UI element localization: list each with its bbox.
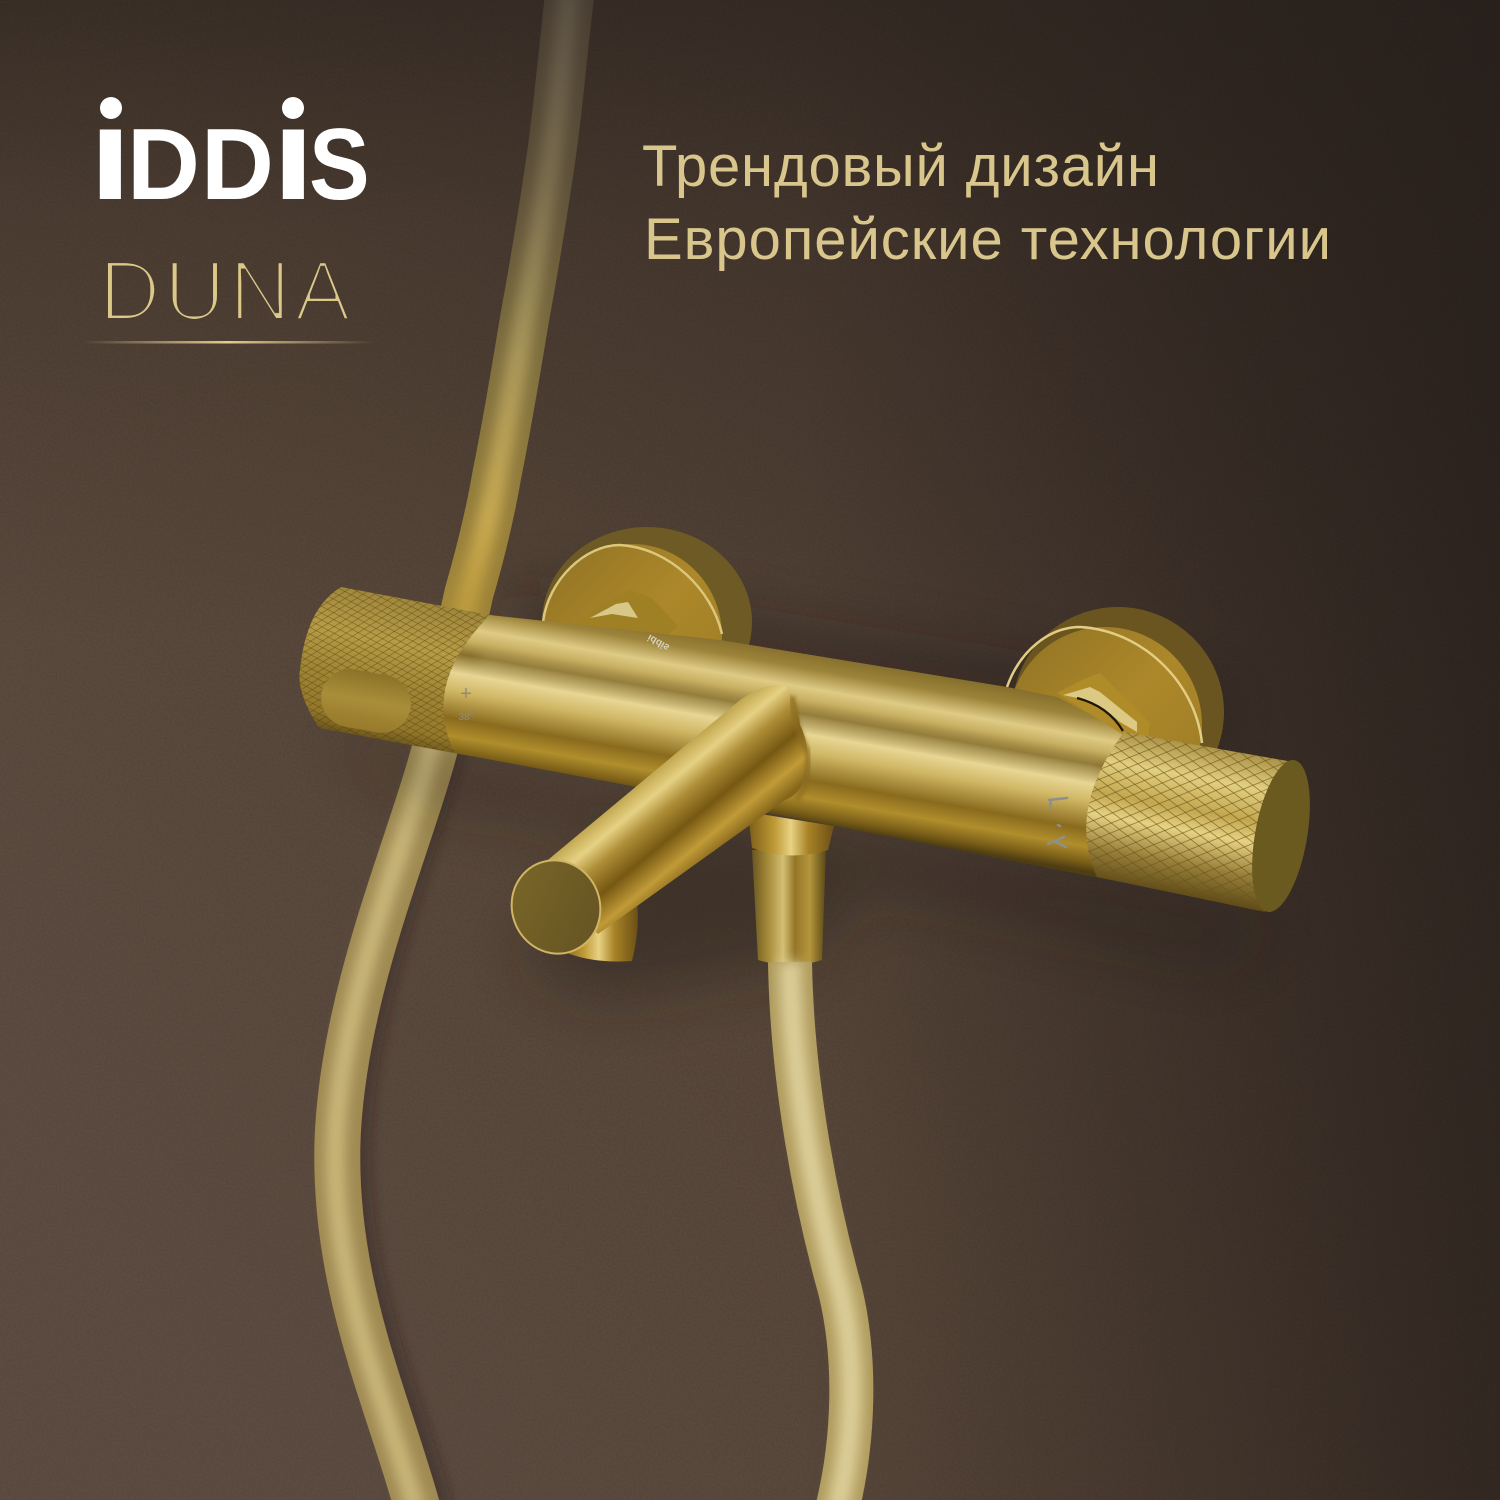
- mode icons: [1048, 798, 1067, 847]
- left plate rim: [543, 545, 722, 634]
- left inner plate: [542, 544, 722, 728]
- upper shower hose: [452, 0, 570, 670]
- logo divider: [82, 341, 374, 344]
- right nut highlight: [1063, 687, 1137, 732]
- logo wordmark: D: [201, 109, 274, 221]
- headline: [642, 134, 1331, 272]
- right outer plate: [1012, 607, 1224, 817]
- right knob end cap: [1242, 756, 1320, 916]
- right plate rim: [1007, 627, 1202, 743]
- junction ring: [792, 696, 809, 800]
- bar logo engraving: iddis: [646, 632, 672, 653]
- logo wordmark: S: [309, 109, 370, 221]
- logo wordmark: I: [90, 107, 131, 221]
- left wall mount: [542, 527, 752, 728]
- left nut highlight: [590, 602, 638, 618]
- aerator: [560, 900, 638, 962]
- shadow above the mixer: [520, 590, 1210, 740]
- lower right shower hose: [790, 962, 851, 1500]
- hose connector: [748, 812, 834, 965]
- temperature scale: 38°: [458, 712, 474, 723]
- temperature scale: +: [460, 683, 472, 705]
- logo wordmark: [90, 107, 370, 221]
- right knurled knob: [1086, 732, 1320, 916]
- bar body: [443, 615, 1124, 880]
- lower left shower hose: [335, 700, 445, 1500]
- headline: Трендовый дизайн: [642, 134, 1159, 199]
- mixer bar: [299, 587, 1320, 916]
- logo wordmark: D: [127, 109, 200, 221]
- right inner plate: [1008, 627, 1202, 823]
- oval button on the knob: [317, 665, 415, 737]
- right nut groove: [1077, 698, 1123, 731]
- brand logo: [90, 97, 370, 221]
- left hex nut: [573, 590, 678, 660]
- logo wordmark: I: [273, 107, 314, 221]
- spout end cap: [499, 848, 613, 966]
- headline: Европейские технологии: [644, 207, 1331, 272]
- shadow cast by the mixer on the wall: [330, 740, 1270, 1000]
- temperature scale: [458, 683, 474, 749]
- left knurled knob: [299, 587, 495, 756]
- spout: [499, 685, 809, 966]
- bar highlight band: [480, 660, 1100, 770]
- right hex nut: [1057, 673, 1150, 738]
- logo dots: [100, 97, 304, 119]
- shadow of lower hose on the wall: [349, 700, 453, 1500]
- temperature scale: −: [462, 732, 472, 749]
- right wall mount: [1007, 607, 1224, 823]
- left outer plate: [542, 527, 752, 717]
- connector tube: [752, 850, 826, 965]
- collection name: DUNA: [99, 244, 351, 339]
- connector collar: [748, 812, 834, 856]
- spout tube: [537, 685, 808, 934]
